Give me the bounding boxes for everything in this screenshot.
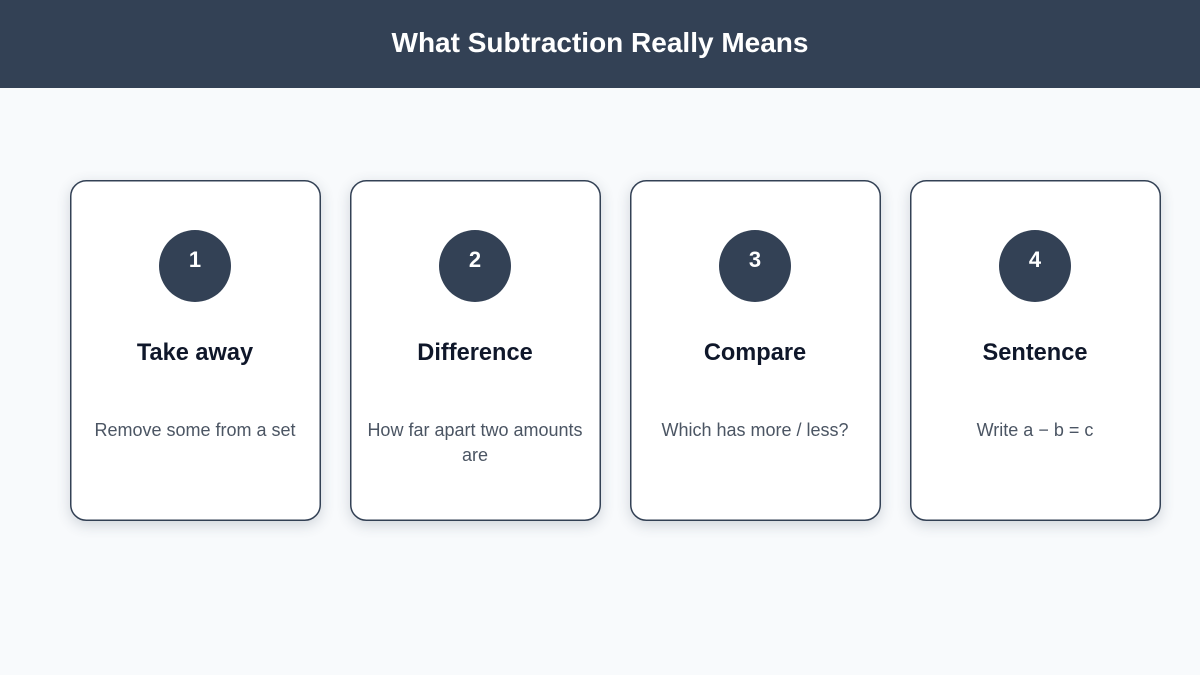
number badge 2 [439,230,511,302]
heading: difference: Difference [417,340,533,366]
description: compare: Which has more / less? [661,420,849,440]
panel: compare [630,180,881,521]
panel: difference [350,180,601,521]
number badge 4: 4 [1029,247,1041,272]
heading: sentence: Sentence [983,340,1087,366]
number badge 3: 3 [749,247,761,272]
panel: sentence [910,180,1161,521]
number badge 4 [999,230,1071,302]
heading: compare: Compare [704,340,806,366]
number badge 1: 1 [189,247,201,272]
heading: take away: Take away [137,340,253,366]
description: take away: Remove some from a set [94,420,296,440]
description: difference: How far apart two amounts are [367,420,583,465]
panel: take away [70,180,321,521]
number badge 2: 2 [469,247,481,272]
number badge 3 [719,230,791,302]
header banner [0,0,1200,88]
description: sentence: Write a − b = c [977,420,1093,440]
number badge 1 [159,230,231,302]
title: What Subtraction Really Means [392,27,808,58]
